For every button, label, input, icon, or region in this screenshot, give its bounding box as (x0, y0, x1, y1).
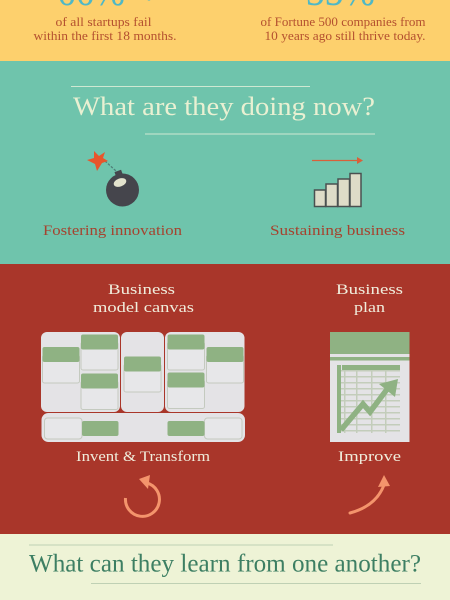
panel: what are they doing now (0, 61, 450, 264)
label: improve: Improve (338, 449, 401, 465)
arrow: upward curve (350, 475, 390, 513)
heading: business model canvas: Business (108, 282, 175, 298)
diagram: business plan spreadsheet (330, 332, 410, 442)
text: startups fail (34, 15, 176, 43)
arrow: circular (125, 475, 159, 516)
panel: canvas versus plan (0, 264, 450, 534)
text: Fortune 500: 10 years ago still thrive today. (264, 29, 426, 43)
panel: what can they learn (0, 534, 450, 600)
heading: business plan: Business (336, 282, 403, 298)
icon: bomb (87, 151, 139, 206)
text: Fortune 500 (260, 15, 426, 43)
heading: business model canvas: model canvas (93, 300, 194, 316)
text: startups fail: of all startups fail (56, 15, 152, 29)
label: sustaining business: Sustaining business (270, 223, 405, 239)
label: fostering innovation: Fostering innovation (43, 223, 183, 239)
label: invent and transform: Invent & Transform (76, 449, 211, 465)
text: Fortune 500: of Fortune 500 companies from (260, 15, 426, 29)
panel: startup statistics (0, 0, 450, 61)
text: startups fail: within the first 18 months. (34, 29, 176, 43)
heading: what are they doing now: What are they doing now? (73, 91, 375, 121)
diagram: business model canvas (41, 332, 245, 442)
icon: growing bars with arrow (312, 157, 363, 206)
heading: business plan (336, 282, 403, 316)
heading: business plan: plan (354, 300, 386, 316)
heading: business model canvas (93, 282, 194, 316)
heading: what can they learn from one another: What can they learn from one another? (29, 550, 421, 578)
